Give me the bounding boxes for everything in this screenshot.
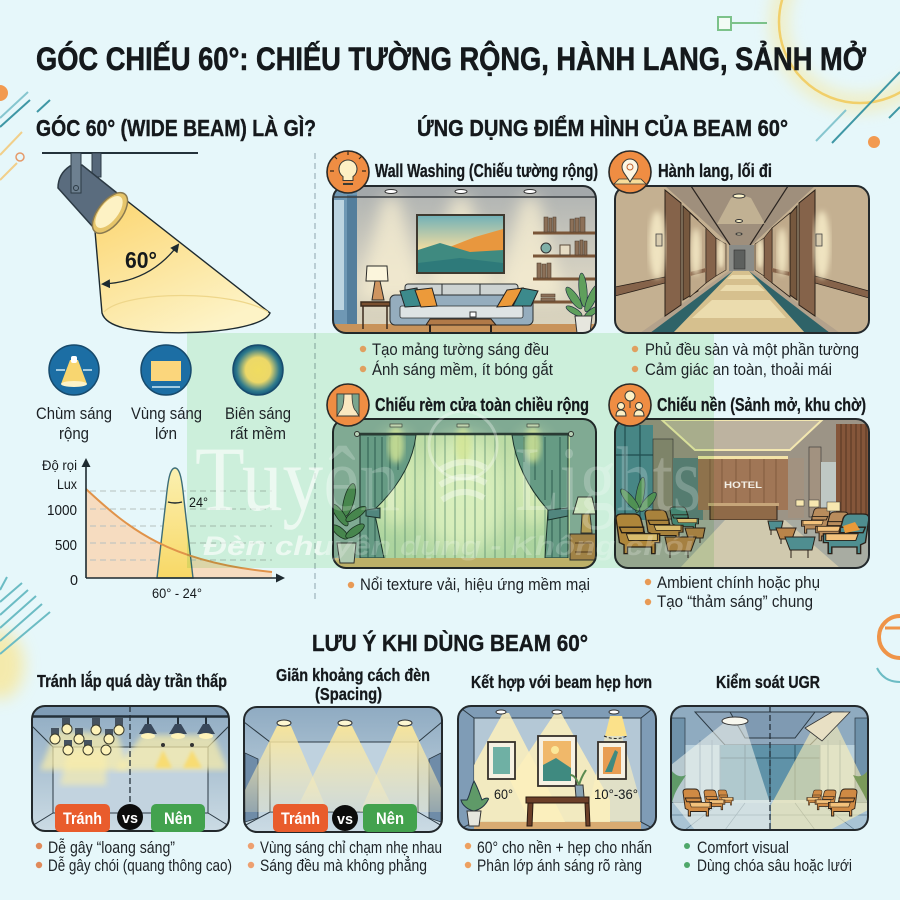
badge: avoid / vs / should: Tránh: [63, 809, 102, 828]
bullets: UGR: [684, 839, 852, 875]
heading: what is 60 degree: GÓC 60° (WIDE BEAM) LÀ GÌ?: [36, 114, 316, 141]
bullets: wall washing: Tạo mảng tường sáng đều: [372, 341, 549, 359]
scene: avoid vs should, track lights: [32, 706, 229, 831]
bullets: spacing: Vùng sáng chỉ chạm nhẹ nhau: [260, 839, 442, 857]
bullets: lobby: [645, 574, 820, 611]
chart: illuminance vs beam angle: 0: [70, 572, 78, 589]
bullets: corridor: Cảm giác an toàn, thoải mái: [645, 361, 832, 379]
watermark text: Lights: [515, 428, 701, 530]
decoration: top left lines: [0, 85, 50, 180]
frame: spacing: [244, 707, 442, 832]
card title: avoid dense install: Tránh lắp quá dày trần thấp: [37, 670, 227, 691]
chart: illuminance vs beam angle: 1000: [47, 502, 77, 519]
label: wide beam: Chùm sáng: [36, 405, 112, 423]
watermark text: Tuyên: [195, 428, 400, 530]
frame: living room: [333, 186, 596, 333]
heading: notes: LƯU Ý KHI DÙNG BEAM 60°: [312, 629, 588, 656]
badge: spacing avoid / vs / should: vs: [337, 811, 353, 828]
card title: combine beams: Kết hợp với beam hẹp hơn: [471, 672, 652, 692]
bullets: lobby: Ambient chính hoặc phụ: [657, 574, 820, 592]
label: wide beam: [36, 405, 112, 443]
decoration: top right sun ring and lines: [718, 0, 900, 148]
badge: avoid / vs / should: vs: [122, 810, 138, 827]
bullets: corridor: Phủ đều sàn và một phần tường: [645, 341, 859, 359]
frame: lobby: [615, 419, 869, 568]
label: wide beam: rộng: [59, 425, 89, 443]
bullets: UGR: Comfort visual: [697, 839, 789, 857]
watermark text: [195, 411, 701, 561]
scene: corridor: [615, 186, 869, 333]
chart: illuminance vs beam angle: [42, 457, 283, 601]
badge: avoid / vs / should: [55, 804, 205, 832]
bullets: combine beams: Phân lớp ánh sáng rõ ràng: [477, 857, 642, 875]
label: very soft edge: [225, 405, 291, 443]
card title: spacing: [276, 665, 430, 704]
label: very soft edge: rất mềm: [230, 425, 286, 443]
heading: applications: ỨNG DỤNG ĐIỂM HÌNH CỦA BEAM 60°: [417, 113, 788, 141]
scene: hotel lobby: HOTEL: [724, 480, 763, 490]
chart: illuminance vs beam angle: Độ rọi: [42, 457, 77, 473]
chart: illuminance vs beam angle: 500: [55, 537, 77, 554]
label: large light area: [131, 405, 202, 443]
frame: curtain: [333, 419, 596, 568]
illustration: spotlight with 60 degree beam: 60°: [125, 247, 157, 273]
badge: spacing avoid / vs / should: Tránh: [281, 809, 320, 828]
frame: track lights: [32, 706, 229, 831]
bullet: curtain: Nổi texture vải, hiệu ứng mềm mại: [360, 576, 590, 594]
bullets: combine beams: 60° cho nền + hẹp cho nhấn: [477, 839, 652, 857]
heading: wall washing: Wall Washing (Chiếu tường rộng): [375, 161, 598, 181]
illustration: spotlight with 60 degree beam: [42, 153, 270, 333]
frame: combine beams: [458, 706, 656, 830]
bullets: avoid dense install: [36, 838, 232, 875]
scene: living room wall washing: [333, 186, 602, 333]
badge: avoid / vs / should: Nên: [164, 809, 192, 828]
bullets: combine beams: [465, 839, 652, 875]
watermark text: Đèn chuyên dụng - Không chói: [203, 531, 694, 561]
label: very soft edge: Biên sáng: [225, 405, 291, 423]
bullets: avoid dense install: Dễ gây “loang sáng”: [48, 838, 175, 857]
scene: curtain: [329, 419, 596, 568]
label: large light area: Vùng sáng: [131, 405, 202, 423]
card title: UGR: Kiểm soát UGR: [716, 672, 820, 692]
bullets: UGR: Dùng chóa sâu hoặc lưới: [697, 857, 852, 875]
scene: combine beams: [458, 706, 656, 830]
chart: illuminance vs beam angle: 24°: [189, 494, 208, 510]
scene: spacing: [244, 707, 442, 832]
heading: corridor: Hành lang, lối đi: [658, 161, 772, 181]
bullets: wall washing: Ánh sáng mềm, ít bóng gắt: [372, 360, 553, 379]
scene: UGR control: [671, 706, 868, 830]
bullets: corridor: [632, 341, 859, 379]
badge: spacing avoid / vs / should: Nên: [376, 809, 404, 828]
bullets: spacing: [248, 839, 442, 875]
card title: spacing: Giãn khoảng cách đèn: [276, 665, 430, 685]
card title: spacing: (Spacing): [315, 684, 382, 704]
chart: illuminance vs beam angle: Lux: [57, 476, 77, 492]
icon: large light area: [141, 345, 191, 395]
icon: wide beam: [49, 345, 99, 395]
heading: curtain: Chiếu rèm cửa toàn chiều rộng: [375, 395, 589, 415]
chart: illuminance vs beam angle: 60° - 24°: [152, 585, 202, 601]
decoration: bottom right rings: [877, 616, 900, 682]
scene: combine beams: 60°: [494, 786, 513, 802]
bullets: avoid dense install: Dễ gây chói (quang thông cao): [48, 856, 232, 875]
scene: hotel lobby: [615, 419, 869, 568]
icon: location pin: [609, 151, 651, 193]
badge: spacing avoid / vs / should: [273, 804, 417, 832]
watermark tint: [187, 333, 714, 568]
frame: corridor: [615, 186, 869, 333]
bullets: lobby: Tạo “thảm sáng” chung: [657, 593, 813, 611]
label: large light area: lớn: [155, 425, 177, 443]
bullets: spacing: Sáng đều mà không phẳng: [260, 856, 427, 875]
divider: [314, 153, 316, 600]
icon: curtain: [327, 384, 369, 426]
bullets: wall washing: [360, 341, 553, 379]
icon: very soft edge: [233, 345, 283, 395]
frame: UGR control: [671, 706, 868, 830]
scene: combine beams: 10°-36°: [594, 786, 638, 802]
icon: people: [609, 384, 651, 426]
decoration: bottom left hatch and glow: [0, 577, 50, 699]
icon: bulb: [327, 151, 369, 193]
